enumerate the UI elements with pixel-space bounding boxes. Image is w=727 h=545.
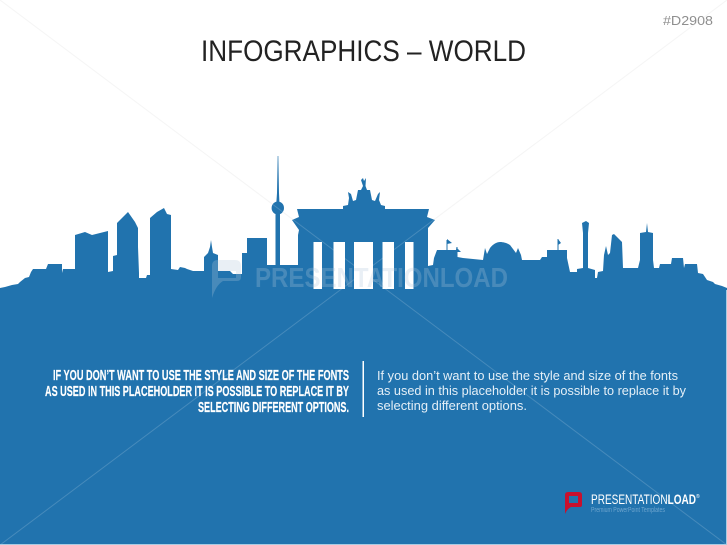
- logo: PresentationLoad: [565, 491, 700, 514]
- gate openings: [314, 242, 414, 289]
- left bold heading text: IF YOU DON’T WANT TO USE THE STYLE AND SIZE OF THE FONTS: [53, 368, 349, 384]
- left bold heading text: AS USED IN THIS PLACEHOLDER IT IS POSSIBLE TO REPLACE IT BY: [45, 384, 349, 400]
- left bold heading text: SELECTING DIFFERENT OPTIONS.: [198, 400, 349, 416]
- right body text: [377, 368, 686, 413]
- watermark: [212, 260, 508, 298]
- logo icon: [565, 492, 582, 514]
- city skyline silhouette with Brandenburg Gate: [0, 156, 727, 545]
- right body text: as used in this placeholder it is possible to replace it by: [377, 383, 686, 398]
- product code: #D2908: [663, 13, 713, 28]
- TV tower sphere: [272, 202, 284, 214]
- logo wordmark: PRESENTATIONLOAD: [591, 491, 696, 507]
- right body text: selecting different options.: [377, 398, 527, 413]
- logo: PresentationLoad: ®: [696, 493, 700, 500]
- logo tagline: Premium PowerPoint Templates: [591, 507, 665, 514]
- flags: [447, 239, 561, 252]
- right body text: If you don’t want to use the style and size of the fonts: [377, 368, 678, 383]
- left bold heading text: [45, 368, 349, 416]
- watermark: PRESENTATIONLOAD: [255, 262, 508, 293]
- title: INFOGRAPHICS – WORLD: [201, 35, 526, 68]
